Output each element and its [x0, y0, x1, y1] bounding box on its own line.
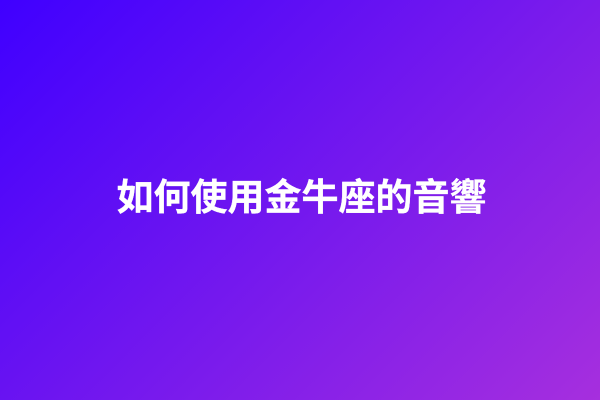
title: 如何使用金牛座的音響	[116, 177, 486, 218]
